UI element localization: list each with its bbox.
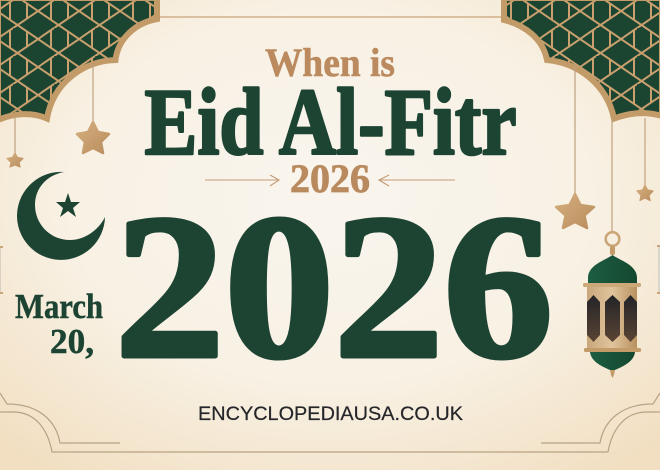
hanging star large right xyxy=(556,64,594,228)
hanging star large left xyxy=(77,64,109,153)
lantern fragment right edge xyxy=(657,245,660,294)
subheading: 2026: 2026 xyxy=(290,156,370,201)
left arrow divider xyxy=(205,175,279,186)
icon: crescent moon and star xyxy=(17,172,105,260)
icon: hanging lantern xyxy=(583,120,641,378)
heading: Eid Al-Fitr: Eid Al-Fitr xyxy=(144,69,516,175)
panel: top-right geometric arch xyxy=(504,0,660,118)
date: March 20, xyxy=(15,287,103,361)
date: March 20,: 20, xyxy=(50,322,94,361)
heading: When is: When is xyxy=(265,40,395,85)
bottom ornament lines xyxy=(0,393,660,452)
hanging star small right xyxy=(637,118,653,200)
right arrow divider xyxy=(379,175,455,186)
top border line xyxy=(158,16,505,18)
panel: top-left geometric arch xyxy=(0,0,157,120)
website footer: ENCYCLOPEDIAUSA.CO.UK xyxy=(198,404,463,425)
date: March 20,: March xyxy=(15,287,103,326)
lantern fragment left edge xyxy=(0,246,3,294)
hanging star small left xyxy=(7,118,23,167)
big year: 2026: 2026 xyxy=(115,172,553,401)
